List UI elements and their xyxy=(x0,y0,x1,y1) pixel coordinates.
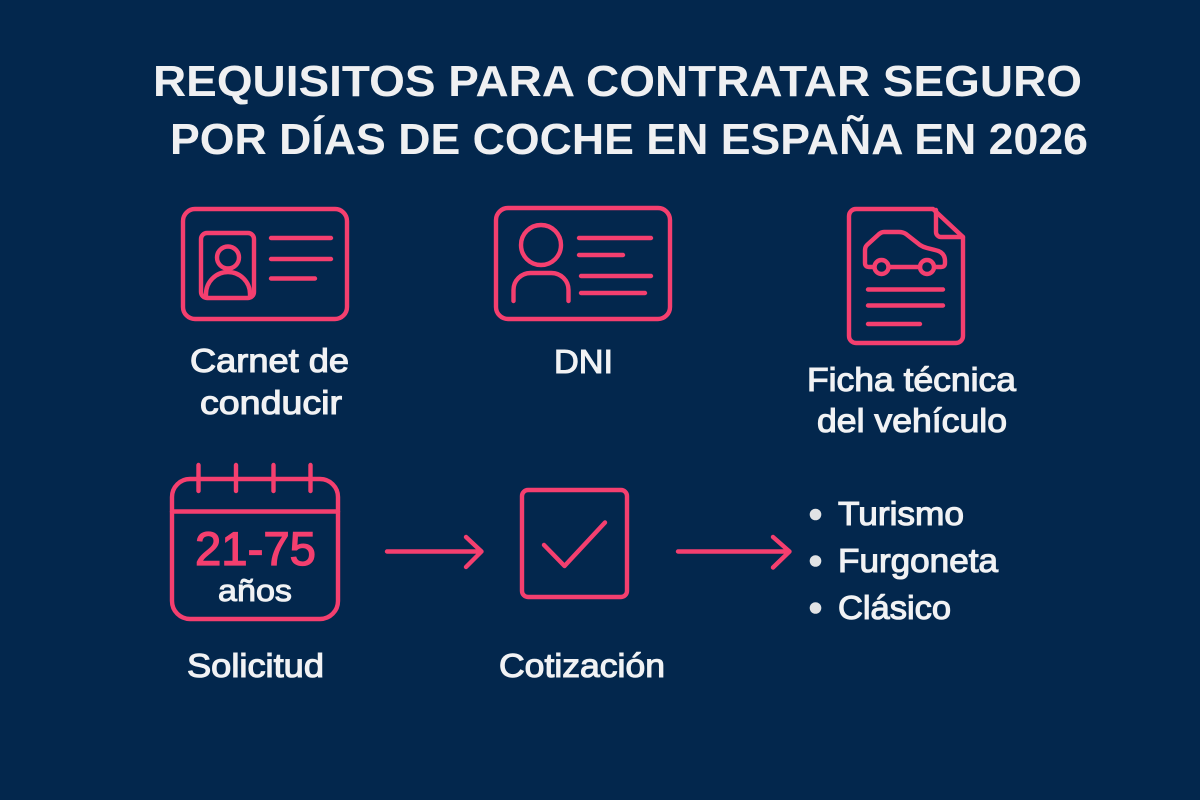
icon: driving licence card xyxy=(183,209,347,319)
title: POR DÍAS DE COCHE EN ESPAÑA EN 2026 xyxy=(170,114,1088,164)
label: cotización: Cotización xyxy=(499,647,665,684)
label: ficha técnica del vehículo: Ficha técnica xyxy=(807,361,1017,398)
label: carnet de conducir xyxy=(190,342,349,421)
arrow: solicitud to cotización xyxy=(387,537,482,567)
label: ficha técnica del vehículo xyxy=(807,361,1017,439)
label: carnet de conducir: conducir xyxy=(200,384,342,421)
icon: checkbox xyxy=(522,490,627,597)
icon: DNI card xyxy=(496,208,670,319)
icon: calendar 21-75 años xyxy=(172,465,338,619)
label: solicitud: Solicitud xyxy=(187,647,324,684)
label: DNI: DNI xyxy=(554,343,613,380)
label: ficha técnica del vehículo: del vehículo xyxy=(817,402,1007,439)
icon: vehicle document with car xyxy=(849,209,963,343)
title: REQUISITOS PARA CONTRATAR SEGURO xyxy=(153,57,1082,106)
arrow: cotización to vehicle types xyxy=(678,537,790,568)
label: carnet de conducir: Carnet de xyxy=(190,342,349,379)
list: vehicle types: Clásico xyxy=(838,589,951,626)
icon: calendar 21-75 años: 21-75 xyxy=(195,522,316,575)
list: vehicle types: Turismo xyxy=(838,495,964,532)
list: vehicle types: Furgoneta xyxy=(838,542,999,579)
list: vehicle types xyxy=(810,495,999,626)
title xyxy=(153,57,1088,164)
icon: calendar 21-75 años: años xyxy=(218,573,292,608)
